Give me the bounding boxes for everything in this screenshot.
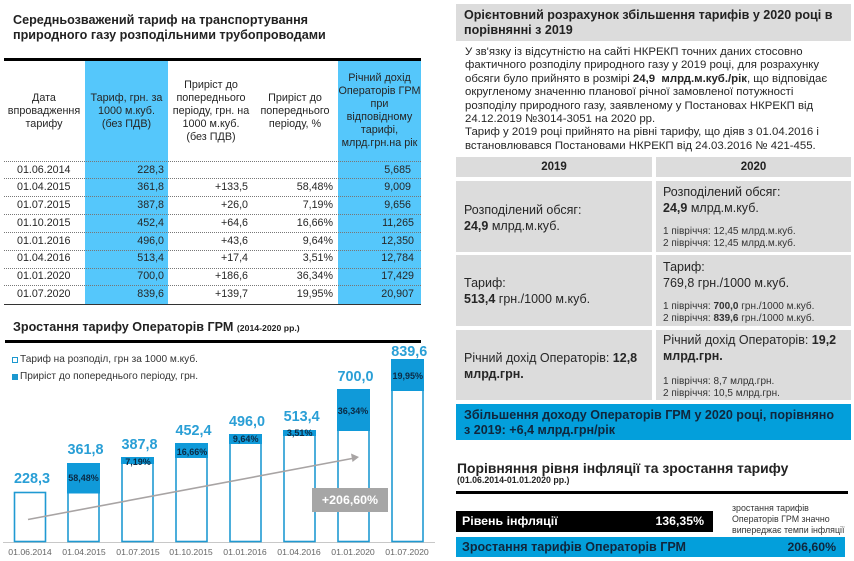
cell 2020 volume — [656, 181, 851, 252]
cell 2019 tariff: 513,4 грн./1000 м.куб. — [464, 292, 590, 306]
header: annual revenue: Річний дохід — [348, 72, 411, 84]
header: date: впровадження — [8, 105, 80, 117]
cell 2019 volume — [456, 181, 652, 252]
row 01.07.2020: 19,95% — [297, 288, 333, 300]
row 01.07.2015: +26,0 — [221, 199, 248, 211]
row 01.04.2015: +133,5 — [215, 181, 248, 193]
axis date 01.04.2015: 01.04.2015 — [62, 547, 106, 557]
bar: inflation — [456, 511, 713, 532]
bar: tariff growth — [456, 537, 845, 557]
row 01.07.2020: 01.07.2020 — [17, 288, 70, 300]
bar label 7,19%: 7,19% — [125, 457, 151, 467]
row 01.04.2016: 01.04.2016 — [17, 252, 70, 264]
cell 2019 volume: 24,9 млрд.м.куб. — [464, 219, 560, 233]
header: increment percent: попереднього — [260, 105, 330, 117]
table top rule — [4, 58, 421, 61]
legend label: tariff: Тариф на розподіл, грн за 1000 м.куб. — [20, 354, 198, 365]
row 01.04.2015 — [17, 181, 411, 193]
text block: explanation: фактичного розподілу природного газу у 2019 році, для розрахунку — [465, 59, 819, 71]
value 361,8: 361,8 — [67, 442, 104, 458]
note: tariff outpaces inflation: зростання тарифів — [732, 503, 809, 513]
bar label 3,51%: 3,51% — [287, 428, 312, 438]
bar label 36,34%: 36,34% — [338, 406, 368, 416]
cell 2020 tariff — [656, 255, 851, 326]
row 01.10.2015: +64,6 — [221, 217, 248, 229]
heading: inflation comparison: (01.06.2014-01.01.2020 рр.) — [457, 475, 569, 485]
bar: inflation: Рівень інфляції — [462, 514, 558, 528]
text block: explanation: Тариф у 2019 році прийнято на рівні тарифу, що діяв з 01.04.2016 і — [465, 126, 819, 138]
table bottom rule — [4, 304, 421, 305]
value 452,4: 452,4 — [175, 423, 212, 439]
row 01.07.2020: +139,7 — [215, 288, 248, 300]
header: date: тарифу — [25, 118, 63, 130]
tariff table — [4, 58, 421, 305]
header: tariff: (без ПДВ) — [102, 118, 151, 130]
column header 2019 — [456, 157, 652, 177]
row 01.04.2016 — [17, 252, 414, 264]
row 01.04.2016: +17,4 — [221, 252, 248, 264]
legend swatch: increment — [12, 374, 18, 380]
row 01.04.2015: 01.04.2015 — [17, 181, 70, 193]
text block: explanation: округленому значенню планової річної замовленої потужності — [465, 86, 793, 98]
bar: inflation: 136,35% — [655, 514, 704, 528]
cell 2020 tariff: 769,8 грн./1000 м.куб. — [663, 276, 789, 290]
bar: tariff growth: 206,60% — [787, 540, 836, 554]
blue column: tariff — [85, 61, 168, 304]
row 01.01.2016: 9,64% — [303, 235, 333, 247]
note: tariff outpaces inflation: випереджає темпи інфляції — [732, 525, 844, 535]
cell 2019 tariff: Тариф: — [464, 276, 506, 290]
callout: revenue increase: з 2019: +6,4 млрд.грн/рік — [464, 423, 615, 437]
column header 2020 — [656, 157, 851, 177]
cell 2019 revenue — [456, 330, 652, 400]
header: date — [8, 92, 80, 130]
text block: explanation: 24.12.2019 №3014-3051 на 2020 рр. — [465, 113, 655, 125]
value 496,0: 496,0 — [229, 414, 265, 430]
text block: explanation — [465, 46, 827, 152]
row 01.04.2016: 12,784 — [381, 252, 414, 264]
row 01.04.2015: 361,8 — [137, 181, 164, 193]
heading: estimated calculation — [456, 4, 851, 41]
chart title: Зростання тарифу Операторів ГРМ (2014-2020 рр.) — [13, 320, 300, 334]
title: average tariff: природного газу розподільними трубопроводами — [13, 28, 326, 42]
row 01.06.2014: 5,685 — [384, 164, 411, 176]
row 01.07.2015: 01.07.2015 — [17, 199, 70, 211]
row 01.10.2015: 16,66% — [297, 217, 333, 229]
row 01.07.2020: 839,6 — [137, 288, 164, 300]
axis date 01.06.2014: 01.06.2014 — [8, 547, 52, 557]
title: average tariff — [13, 13, 326, 42]
row 01.01.2016: +43,6 — [221, 235, 248, 247]
column header 2020: 2020 — [741, 161, 766, 173]
row 01.01.2020: 36,34% — [297, 270, 333, 282]
row 01.01.2020: 17,429 — [381, 270, 414, 282]
header: increment: (без ПДВ) — [186, 131, 236, 143]
heading: estimated calculation: Орієнтовний розрахунок збільшення тарифів у 2020 році в — [464, 8, 832, 22]
value 228,3: 228,3 — [14, 471, 50, 487]
note: tariff outpaces inflation — [732, 503, 844, 535]
header: annual revenue: при — [371, 98, 388, 110]
value 839,6: 839,6 — [391, 344, 427, 360]
cell 2019 volume: Розподілений обсяг: — [464, 203, 581, 217]
header: increment: Приріст до — [184, 79, 238, 91]
heading: inflation comparison: Порівняння рівня інфляції та зростання тарифу — [457, 460, 788, 476]
header: tariff: Тариф, грн. за — [91, 92, 162, 104]
axis date 01.07.2015: 01.07.2015 — [116, 547, 160, 557]
cell 2019 revenue: млрд.грн. — [464, 367, 524, 381]
row 01.07.2015: 9,656 — [384, 199, 411, 211]
header: increment: попереднього — [176, 92, 246, 104]
callout: +206,60%: +206,60% — [322, 493, 378, 507]
bar label 19,95%: 19,95% — [393, 371, 423, 381]
row 01.04.2016: 513,4 — [137, 252, 164, 264]
header: annual revenue: млрд.грн.на рік — [342, 137, 417, 149]
cell 2019 tariff — [456, 255, 652, 326]
row 01.01.2016: 12,350 — [381, 235, 414, 247]
callout: +206,60% — [312, 488, 388, 512]
axis date 01.10.2015: 01.10.2015 — [169, 547, 213, 557]
bar: tariff growth: Зростання тарифів Операторів ГРМ — [462, 540, 686, 554]
header: annual revenue — [339, 72, 420, 149]
header: annual revenue: відповідному — [347, 111, 412, 123]
row 01.10.2015: 01.10.2015 — [17, 217, 70, 229]
cell 2020 tariff: Тариф: — [663, 260, 705, 274]
row 01.06.2014 — [17, 164, 411, 176]
blue column: annual revenue — [338, 61, 421, 304]
row 01.01.2020 — [17, 270, 414, 282]
cell 2019 revenue: Річний дохід Операторів: 12,8 — [464, 351, 637, 365]
row 01.10.2015 — [17, 217, 414, 229]
header: increment: 1000 м.куб. — [182, 118, 240, 130]
text block: explanation: розподілу природного газу, заявленому у Постановах НКРЕКП від — [465, 100, 813, 112]
cell 2020 volume: Розподілений обсяг: — [663, 185, 780, 199]
value 387,8: 387,8 — [121, 437, 158, 453]
value 513,4: 513,4 — [284, 409, 320, 425]
cell 2020 volume: 24,9 млрд.м.куб. — [663, 201, 759, 215]
text block: explanation: встановлювався Постановами НКРЕКП від 24.03.2016 № 421-455. — [465, 140, 816, 152]
cell 2020 tariff: 2 півріччя: 839,6 грн./1000 м.куб. — [663, 313, 814, 324]
legend — [12, 354, 198, 382]
header: tariff: 1000 м.куб. — [98, 105, 155, 117]
row 01.01.2020: +186,6 — [215, 270, 248, 282]
header: tariff — [90, 92, 162, 130]
axis date 01.01.2020: 01.01.2020 — [331, 547, 375, 557]
axis date 01.07.2020: 01.07.2020 — [385, 547, 429, 557]
row 01.06.2014: 01.06.2014 — [17, 164, 70, 176]
header: increment percent: Приріст до — [268, 92, 322, 104]
heading: estimated calculation: порівнянні з 2019 — [464, 23, 573, 37]
cell 2020 tariff: 1 півріччя: 700,0 грн./1000 м.куб. — [663, 301, 814, 312]
row 01.06.2014: 228,3 — [137, 164, 164, 176]
row 01.01.2016: 01.01.2016 — [17, 235, 70, 247]
cell 2020 revenue: 2 півріччя: 10,5 млрд.грн. — [663, 388, 780, 399]
column header 2019: 2019 — [541, 161, 567, 173]
axis date 01.04.2016: 01.04.2016 — [277, 547, 321, 557]
bar chart — [3, 359, 435, 543]
row 01.04.2016: 3,51% — [303, 252, 333, 264]
row 01.07.2015 — [17, 199, 411, 211]
callout: revenue increase — [456, 404, 851, 440]
legend label: increment: Приріст до попереднього періоду, грн. — [20, 371, 198, 382]
chart rule — [5, 340, 421, 343]
header: annual revenue: Операторів ГРМ — [339, 85, 420, 97]
cell 2020 revenue — [656, 330, 851, 400]
bar label 9,64%: 9,64% — [233, 434, 258, 444]
row 01.04.2015: 9,009 — [384, 181, 411, 193]
row 01.10.2015: 11,265 — [382, 217, 414, 229]
row 01.01.2020: 01.01.2020 — [17, 270, 70, 282]
row 01.04.2015: 58,48% — [297, 181, 333, 193]
header: annual revenue: тарифі, — [361, 124, 398, 136]
note: tariff outpaces inflation: Операторів ГРМ значно — [732, 514, 830, 524]
row 01.10.2015: 452,4 — [137, 217, 164, 229]
row 01.01.2016 — [17, 235, 414, 247]
text block: explanation: У зв'язку із відсутністю на сайті НКРЕКП точних даних стосовно — [465, 46, 803, 58]
row 01.07.2020: 20,907 — [381, 288, 414, 300]
header: increment — [173, 79, 250, 143]
row 01.07.2020 — [17, 288, 414, 300]
row 01.07.2015: 387,8 — [137, 199, 164, 211]
cell 2020 revenue: млрд.грн. — [663, 349, 723, 363]
cell 2020 volume: 2 півріччя: 12,45 млрд.м.куб. — [663, 238, 796, 249]
header: increment percent: періоду, % — [269, 118, 321, 130]
title: average tariff: Середньозважений тариф на транспортування — [13, 13, 308, 27]
value 700,0: 700,0 — [337, 369, 374, 385]
cell 2020 revenue: Річний дохід Операторів: 19,2 — [663, 333, 836, 347]
text block: explanation: обсяги було прийнято в розмірі 24,9 млрд.м.куб./рік, що відповідає — [465, 73, 827, 85]
heading: inflation comparison — [457, 460, 788, 485]
header: increment: періоду, грн. на — [173, 105, 249, 117]
bar label 58,48%: 58,48% — [68, 473, 99, 483]
bar label 16,66%: 16,66% — [177, 447, 207, 457]
legend swatch: tariff — [12, 357, 18, 363]
cell 2020 volume: 1 півріччя: 12,45 млрд.м.куб. — [663, 226, 796, 237]
cell 2020 revenue: 1 півріччя: 8,7 млрд.грн. — [663, 376, 774, 387]
comparison rule — [456, 491, 848, 494]
header: date: Дата — [32, 92, 56, 104]
axis date 01.01.2016: 01.01.2016 — [223, 547, 267, 557]
row 01.07.2015: 7,19% — [303, 199, 333, 211]
header: increment percent — [260, 92, 330, 130]
row 01.01.2020: 700,0 — [137, 270, 164, 282]
callout: revenue increase: Збільшення доходу Операторів ГРМ у 2020 році, порівняно — [464, 408, 834, 422]
row 01.01.2016: 496,0 — [137, 235, 164, 247]
